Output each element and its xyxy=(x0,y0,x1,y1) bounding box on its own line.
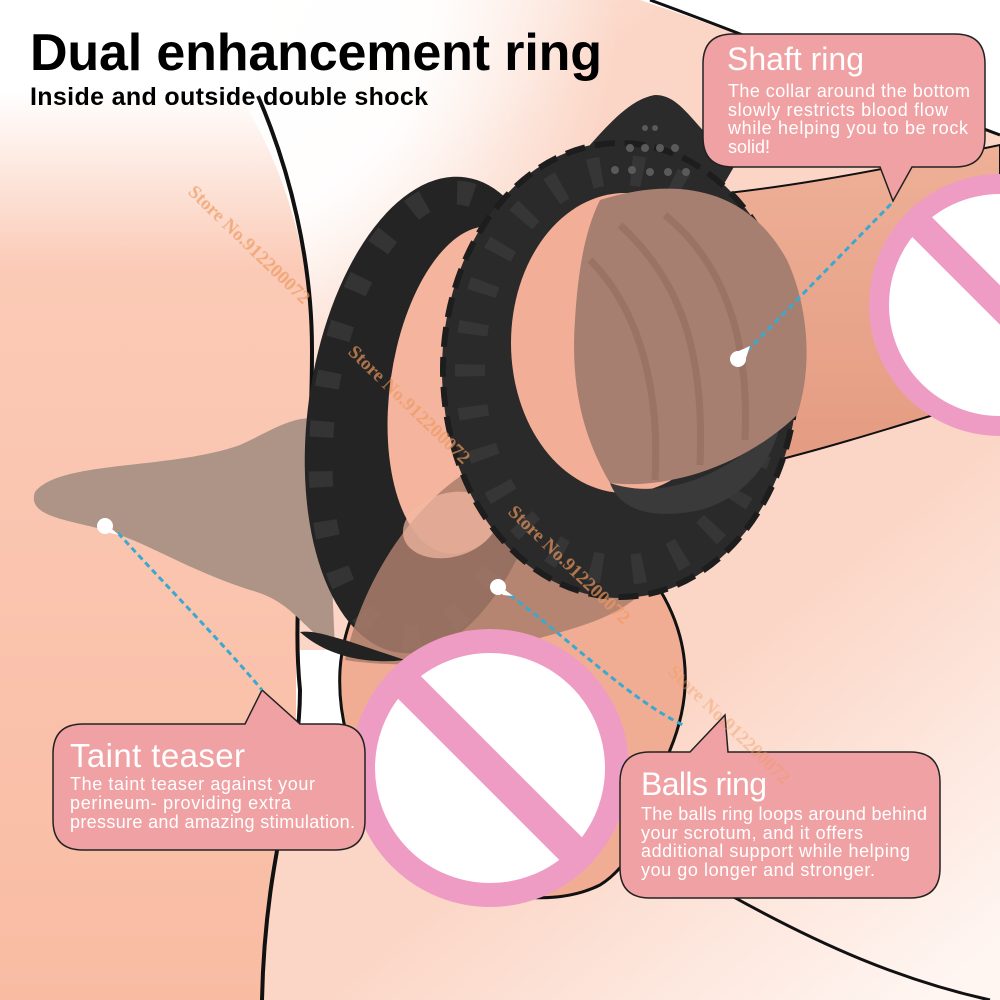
callout: taint teaser: Taint teaser xyxy=(70,737,245,774)
censor sign: right xyxy=(879,184,1000,426)
subtitle: Inside and outside double shock xyxy=(30,83,428,111)
title: Dual enhancement ring xyxy=(30,24,602,82)
callout: taint teaser: The taint teaser against your xyxy=(70,774,315,794)
callout: balls ring: your scrotum, and it offers xyxy=(641,823,863,843)
watermarks: Store No.912200072 xyxy=(184,181,314,309)
watermarks: Store No.912200072 xyxy=(344,341,474,469)
back ring (balls ring) xyxy=(276,160,588,670)
front ring (shaft ring) with nub xyxy=(442,95,807,598)
watermarks: Store No.912200072 xyxy=(664,661,794,789)
callout: taint teaser xyxy=(53,690,365,850)
callout: shaft ring: Shaft ring xyxy=(727,41,864,77)
translucent ring sleeve over lower area xyxy=(300,470,645,664)
pointer: balls ring xyxy=(490,579,685,726)
callout: balls ring: Balls ring xyxy=(641,766,767,802)
callout: balls ring: The balls ring loops around behind xyxy=(641,804,927,824)
watermarks: Store No.912200072 xyxy=(504,501,634,629)
scrotum base shape xyxy=(340,470,685,898)
watermarks xyxy=(184,181,794,789)
callout: taint teaser: perineum- providing extra xyxy=(70,793,292,813)
callout: balls ring: you go longer and stronger. xyxy=(641,860,875,880)
pointer: shaft ring xyxy=(730,204,891,367)
pointer: taint teaser xyxy=(97,518,262,690)
callout: shaft ring: while helping you to be rock xyxy=(727,118,969,138)
callout: shaft ring xyxy=(703,34,985,201)
callout: shaft ring: solid! xyxy=(728,137,770,157)
callout: balls ring xyxy=(620,715,940,898)
callout: taint teaser: pressure and amazing stimulation. xyxy=(70,812,355,832)
censor sign: bottom xyxy=(363,641,617,895)
texture dots on nub xyxy=(611,125,690,176)
taint teaser xyxy=(34,418,335,650)
callout: shaft ring: slowly restricts blood flow xyxy=(728,100,949,120)
callout: shaft ring: The collar around the bottom xyxy=(728,81,970,101)
callout: balls ring: additional support while helping xyxy=(641,841,910,861)
shaft shape behind rings xyxy=(610,145,1000,490)
